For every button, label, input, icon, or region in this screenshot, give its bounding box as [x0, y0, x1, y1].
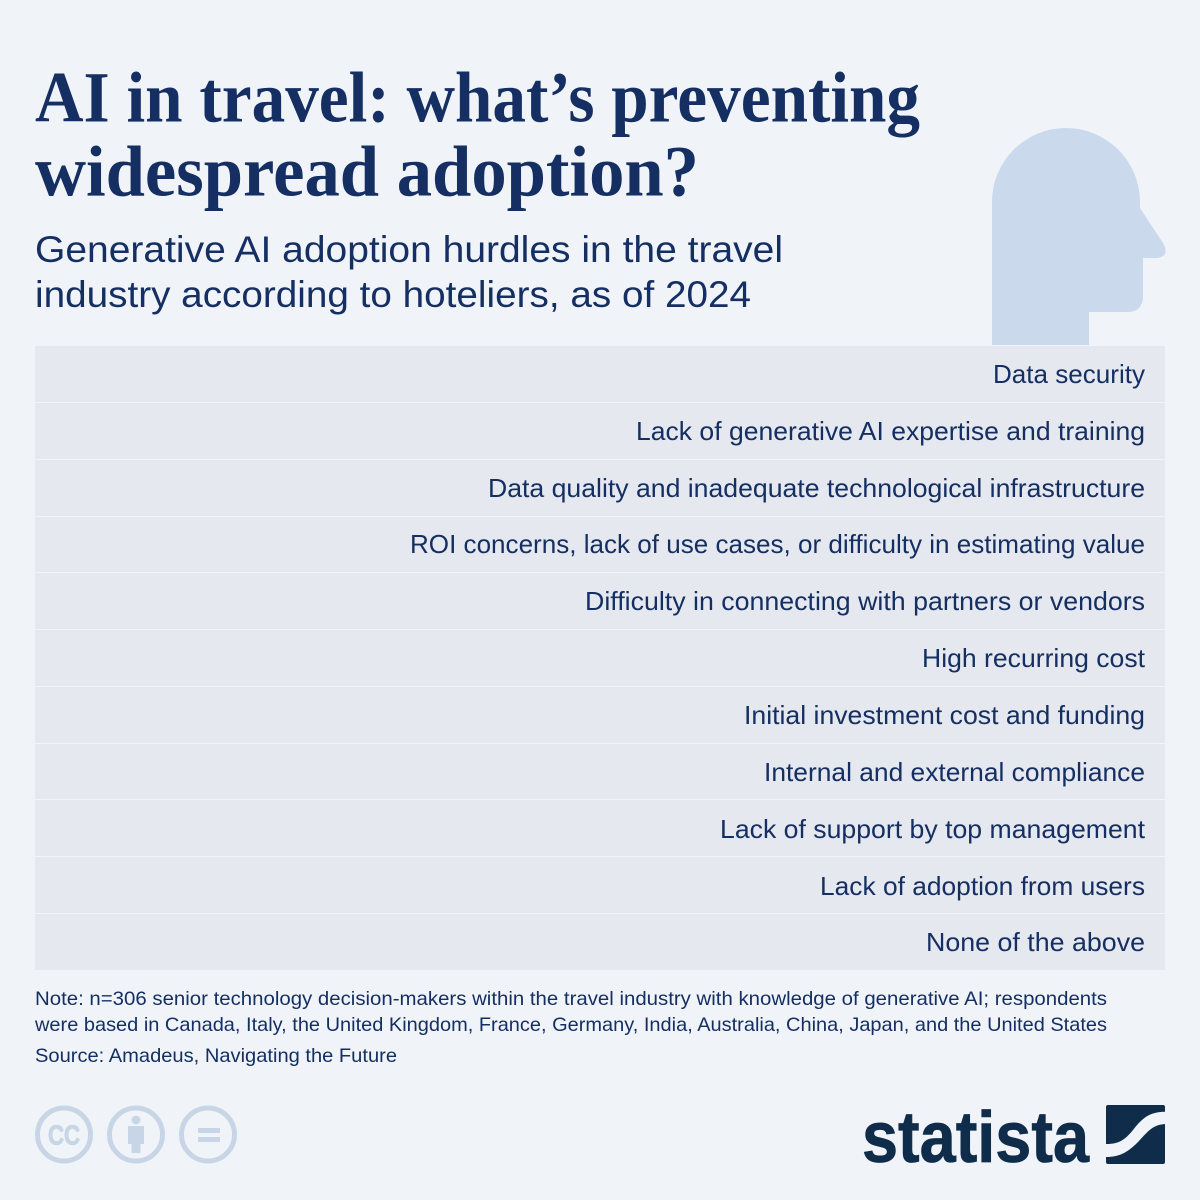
note: were based in Canada, Italy, the United Kingdom, France, Germany, India, Australia, China, Japan, and the United States: [34, 1014, 1107, 1036]
row: Lack of generative AI expertise and training: Lack of generative AI expertise and training: [636, 416, 1145, 446]
statista logo: [862, 1098, 1165, 1178]
row: High recurring cost: High recurring cost: [922, 643, 1146, 673]
row: Initial investment cost and funding: [35, 687, 1165, 743]
row: ROI concerns, lack of use cases, or difficulty in estimating value: [35, 517, 1165, 572]
row: Lack of adoption from users: [35, 857, 1165, 913]
subtitle: [35, 229, 783, 315]
row: None of the above: [35, 914, 1165, 970]
row: ROI concerns, lack of use cases, or difficulty in estimating value: ROI concerns, lack of use cases, or difficulty in estimating value: [410, 529, 1145, 559]
icon: CC: CC: [48, 1120, 80, 1150]
icon: CC: [38, 1108, 90, 1161]
row: Difficulty in connecting with partners or vendors: [35, 573, 1165, 629]
title: widespread adoption?: [35, 132, 699, 212]
icon: head silhouette: [992, 128, 1166, 345]
icon: creative commons licence badges: [38, 1108, 234, 1161]
row: High recurring cost: [35, 630, 1165, 686]
title: [35, 58, 920, 212]
row: Internal and external compliance: Internal and external compliance: [764, 757, 1145, 787]
source: Source: Amadeus, Navigating the Future: [35, 1045, 397, 1067]
row: Lack of generative AI expertise and training: [35, 403, 1165, 459]
icon: no derivatives equals: [182, 1108, 234, 1161]
row: Difficulty in connecting with partners or vendors: Difficulty in connecting with partners or vendors: [585, 586, 1145, 616]
icon: attribution person: [110, 1108, 162, 1161]
row: Lack of adoption from users: Lack of adoption from users: [820, 871, 1145, 901]
row: None of the above: None of the above: [926, 927, 1145, 957]
row: Lack of support by top management: [35, 800, 1165, 856]
row: Internal and external compliance: [35, 744, 1165, 799]
note: [34, 988, 1107, 1036]
row: Data quality and inadequate technological infrastructure: Data quality and inadequate technological infrastructure: [488, 473, 1145, 503]
row: Data quality and inadequate technological infrastructure: [35, 460, 1165, 516]
logo wordmark: statista: [862, 1098, 1090, 1178]
subtitle: industry according to hoteliers, as of 2024: [35, 274, 751, 315]
subtitle: Generative AI adoption hurdles in the travel: [35, 229, 783, 270]
logo mark: [1106, 1105, 1165, 1164]
panel: ranked list of adoption hurdles: [35, 346, 1165, 970]
row: Lack of support by top management: Lack of support by top management: [720, 814, 1146, 844]
row: Data security: [35, 346, 1165, 402]
title: AI in travel: what’s preventing: [35, 58, 920, 138]
note: Note: n=306 senior technology decision-makers within the travel industry with knowledge of generative AI; respondents: [35, 988, 1107, 1010]
row: Data security: Data security: [993, 359, 1145, 389]
row: Initial investment cost and funding: Initial investment cost and funding: [744, 700, 1145, 730]
